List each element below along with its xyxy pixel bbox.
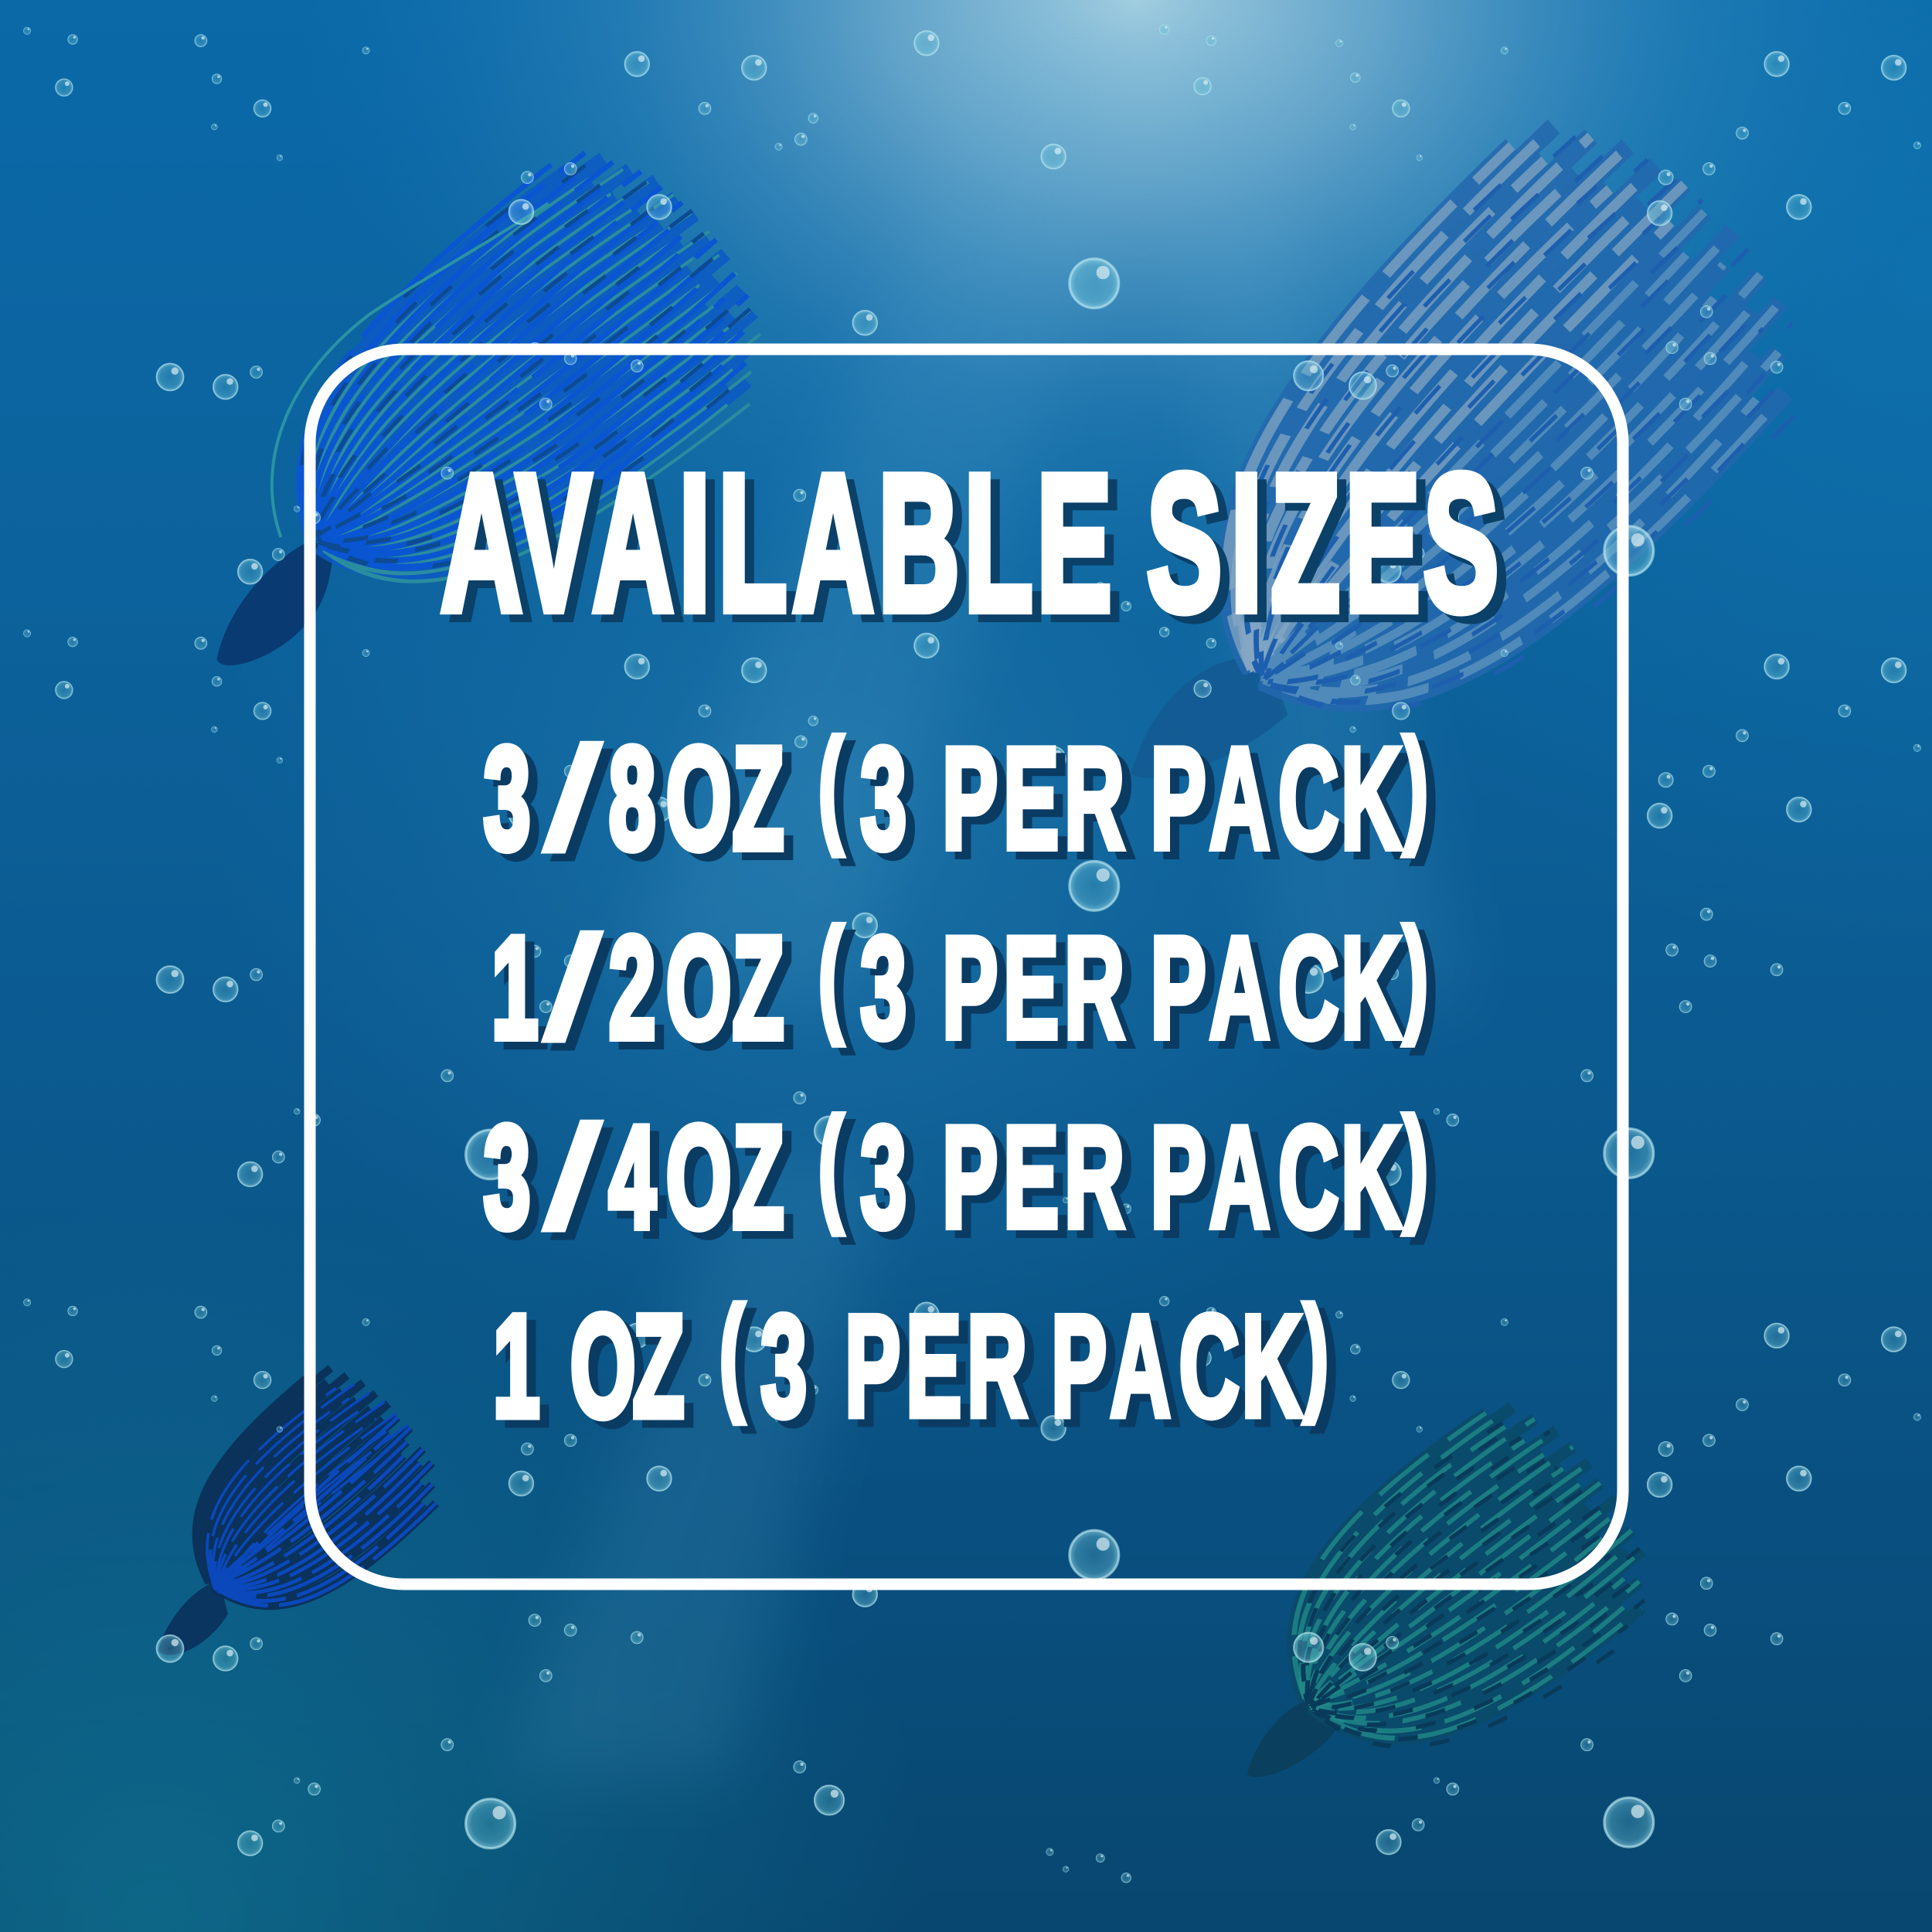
size row: 3/8oz: 8OZ xyxy=(609,719,784,879)
jig: grey-blue, top right xyxy=(1118,72,1866,826)
size row: 1 oz: ) xyxy=(1304,1281,1328,1423)
size row: 1/2oz: 1 xyxy=(492,908,538,1069)
size row: 3/4oz: ( xyxy=(818,1092,843,1234)
size row: 3/4oz xyxy=(484,1092,1428,1258)
jig: green teal, bottom right xyxy=(1226,1376,1697,1825)
size row: 3/4oz: 3 PER PACK xyxy=(860,1097,1401,1258)
title: AVAILABLE SIZES xyxy=(440,435,1498,651)
size row: 3/4oz: 3 xyxy=(484,1097,530,1258)
size row: 1 oz: 1 OZ xyxy=(493,1286,684,1447)
size row: 1/2oz: ( xyxy=(818,903,843,1045)
jig: blue, top left xyxy=(213,104,818,675)
panel frame xyxy=(310,349,1623,1584)
size row: 1 oz: 3 PER PACK xyxy=(760,1286,1302,1447)
size row: 1/2oz xyxy=(492,903,1428,1069)
size row: 1 oz: ( xyxy=(719,1281,744,1423)
size row: 3/4oz: / xyxy=(539,1096,606,1257)
size row: 3/8oz xyxy=(484,713,1428,879)
jig: navy blue, bottom left xyxy=(151,1344,465,1655)
size row: 3/8oz: ) xyxy=(1403,713,1428,855)
size row: 3/8oz: 3 xyxy=(484,719,530,879)
size row: 1 oz xyxy=(493,1281,1328,1447)
size row: 3/4oz: 4OZ xyxy=(609,1097,784,1258)
size row: 3/8oz: ( xyxy=(818,713,843,855)
size row: 3/8oz: / xyxy=(539,717,606,879)
size row: 1/2oz: ) xyxy=(1403,903,1428,1045)
size row: 3/8oz: 3 PER PACK xyxy=(860,719,1401,879)
size row: 1/2oz: / xyxy=(539,906,606,1068)
size row: 1/2oz: 2OZ xyxy=(609,908,784,1069)
size row: 3/4oz: ) xyxy=(1403,1092,1428,1234)
size row: 1/2oz: 3 PER PACK xyxy=(860,908,1401,1069)
